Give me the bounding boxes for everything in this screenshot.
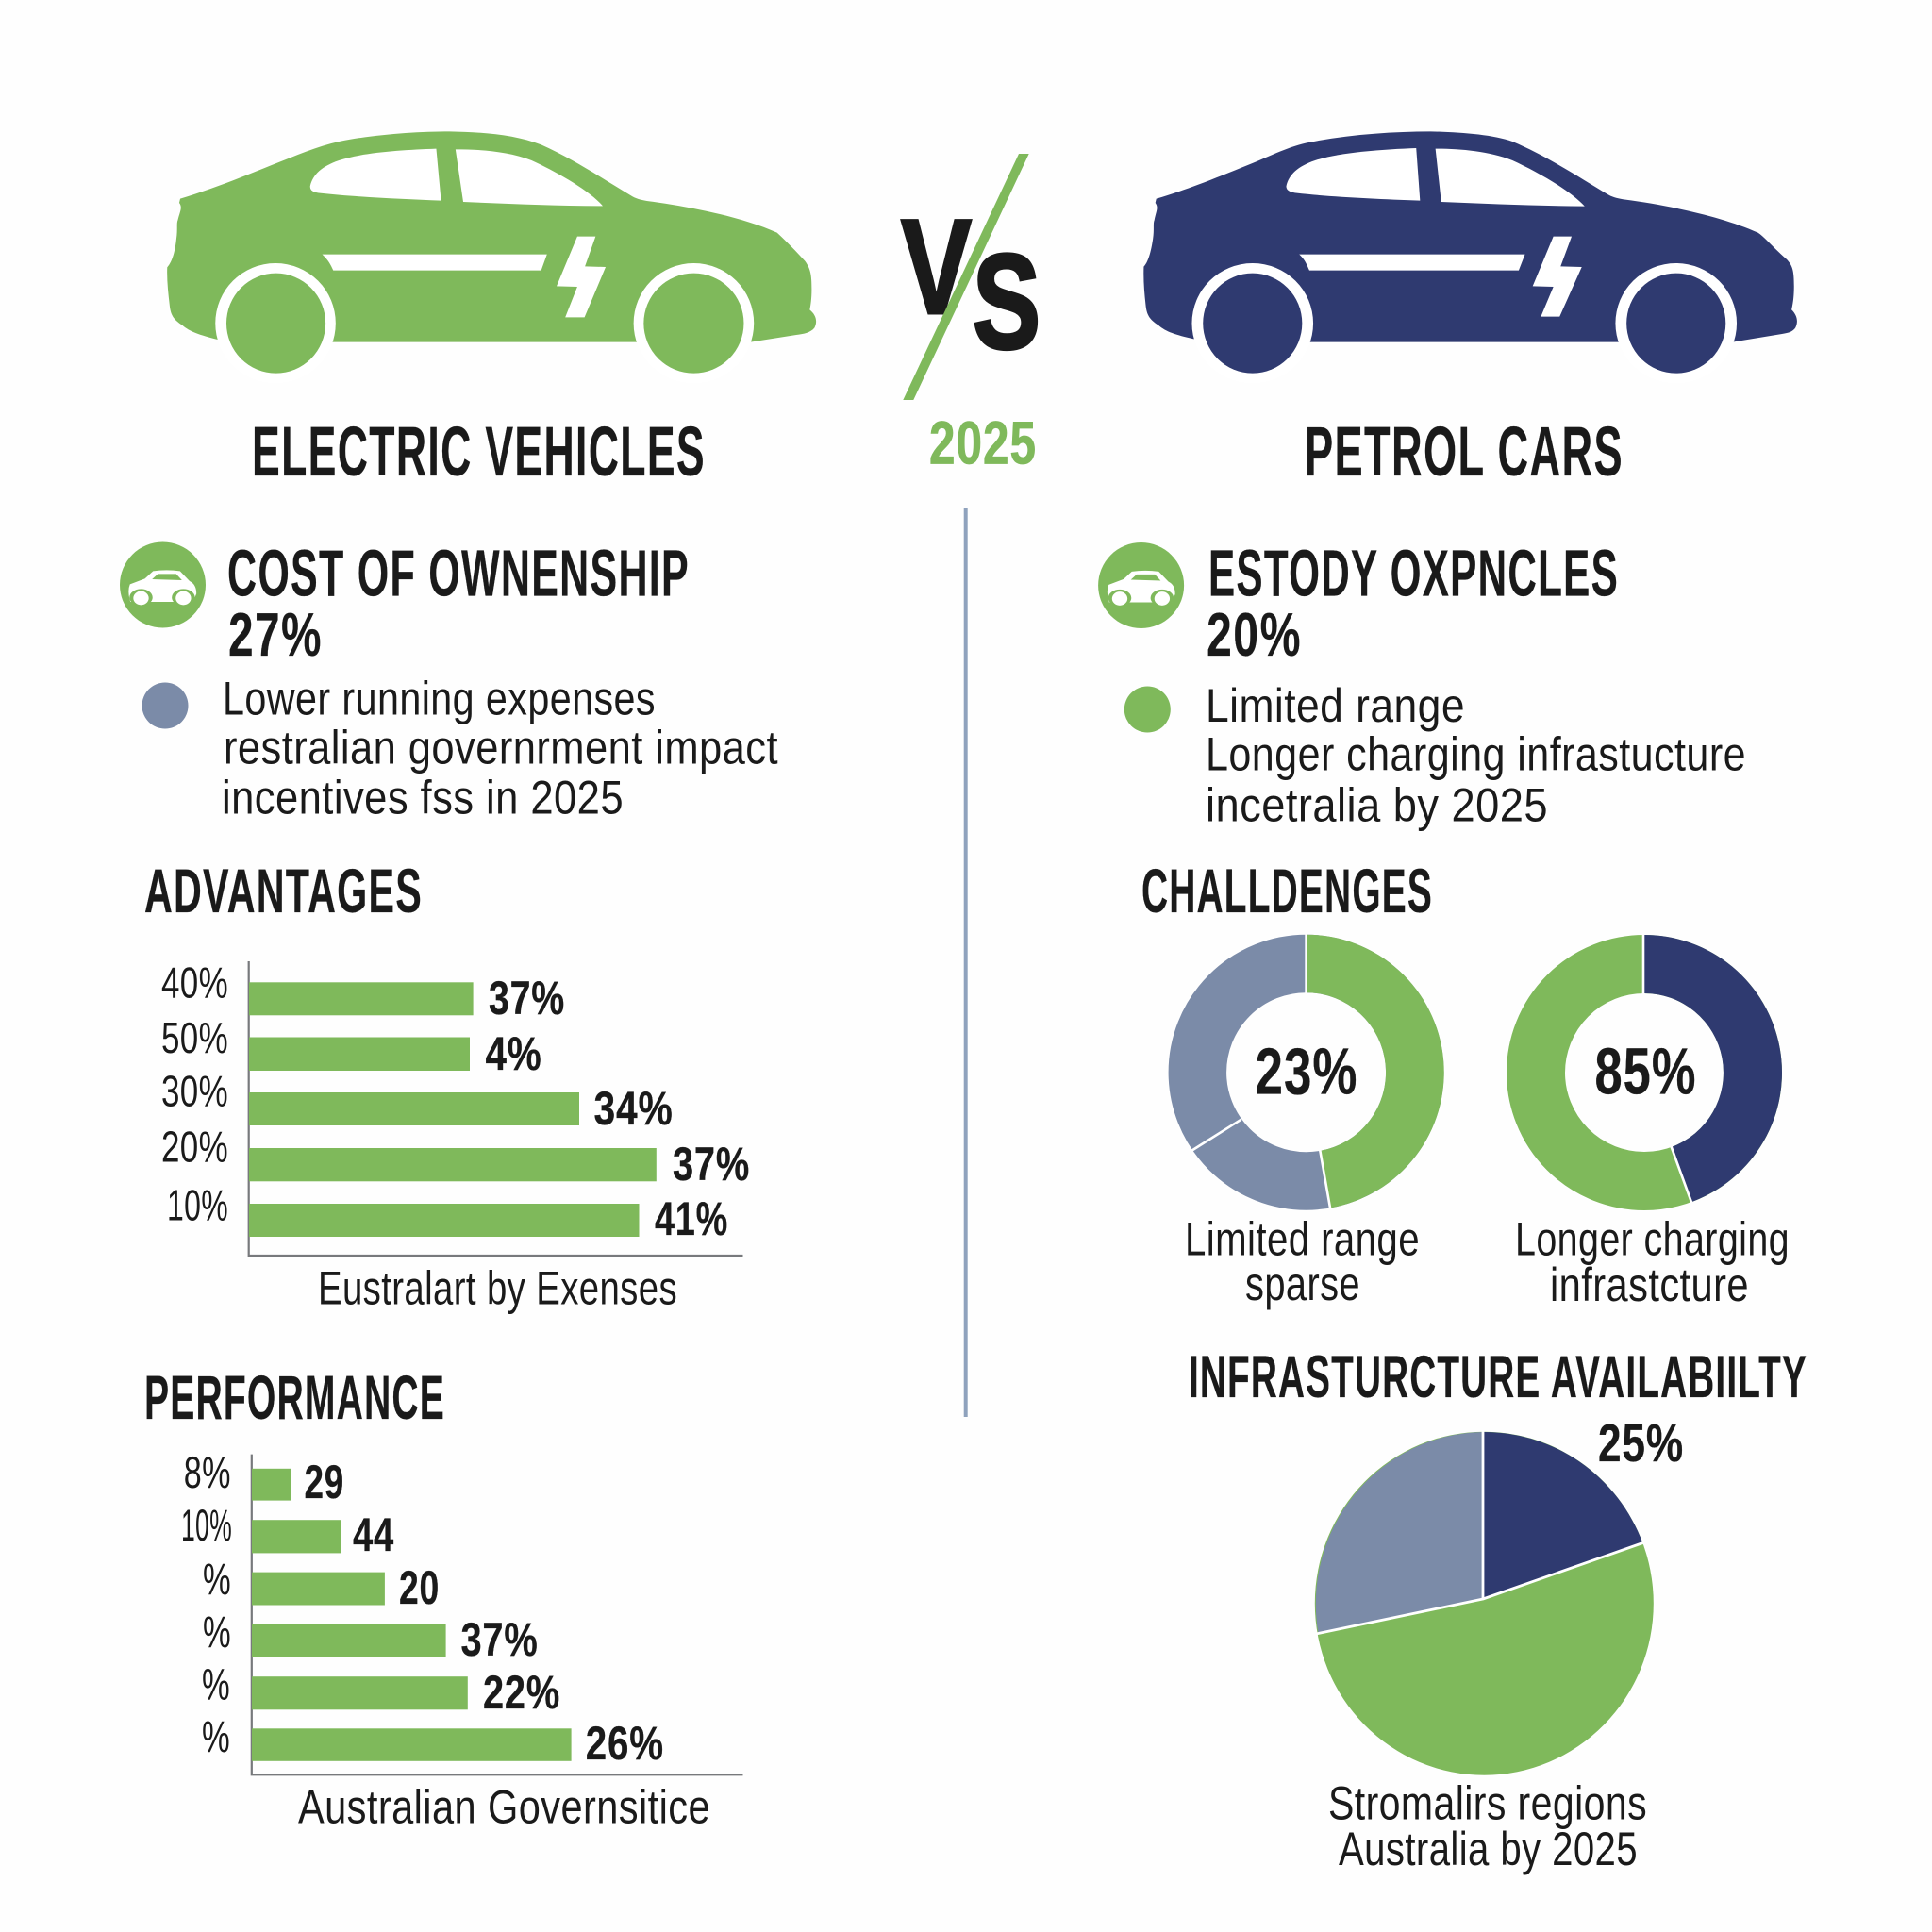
bar chart: advantages: 37% [673,1138,750,1191]
icon: green circle with car [120,541,206,628]
bar chart: advantages: 4% [485,1027,541,1080]
bar chart: advantages: 41% [655,1192,728,1245]
heading: estody oxpncles: ESTODY OXPNCLES [1208,536,1619,609]
bar chart: performance: % [202,1711,230,1761]
bar chart: performance: % [203,1554,231,1604]
panel: infrastructure availability [1189,1344,1807,1875]
panel: petrol cars header [1143,131,1797,491]
callout: 25%: 25% [1598,1413,1684,1474]
heading: petrol cars: PETROL CARS [1305,412,1624,491]
panel: advantages [144,856,750,1314]
bar chart: performance: % [202,1658,230,1709]
bullet [142,683,189,728]
pie caption: Stromalirs regions [1328,1777,1647,1830]
bar chart: performance [181,1447,743,1834]
bar chart: advantages: Eustralart by Exenses [318,1261,677,1314]
stat: 20%: 20% [1207,600,1302,669]
donut chart: longer charging [1515,933,1790,1311]
bar chart: performance: 22% [483,1666,560,1719]
pie caption: Australia by 2025 [1339,1823,1638,1875]
icon: green electric car [167,131,816,383]
bar chart: advantages: 30% [161,1067,228,1116]
pie chart: availability [1315,1430,1654,1775]
bar chart: advantages: 10% [167,1180,228,1229]
panel: challenges [1141,856,1790,1311]
donut chart: limited range [1185,933,1444,1310]
heading: challdenges: CHALLDENGES [1141,856,1433,925]
bullet text: Lower running expenses [223,672,656,724]
year: 2025 [929,409,1037,477]
heading: advantages: ADVANTAGES [144,856,423,925]
bullet text [222,672,778,824]
donut chart: longer charging: Longer charging [1515,1213,1790,1266]
bar chart: performance: 37% [460,1613,538,1666]
panel: subsidy expenses [1098,536,1746,832]
icon: navy car [1143,131,1797,383]
bullet [1124,687,1171,732]
slash [903,154,1029,400]
bar chart: performance: 44 [353,1508,394,1561]
bullet text: Longer charging infrastucture [1206,728,1746,781]
bullet text: incentives fss in 2025 [222,771,624,824]
panel: versus badge [901,154,1041,477]
bullet text [1206,679,1746,832]
bar chart: advantages: 50% [161,1013,228,1062]
heading: performance: PERFORMANCE [144,1362,445,1432]
donut chart: longer charging: infrastcture [1550,1258,1749,1311]
bar chart: performance: 26% [586,1717,664,1770]
bar chart: performance: 8% [184,1447,231,1497]
donut chart: limited range: Limited range [1185,1213,1420,1266]
pie caption [1328,1777,1647,1875]
center divider [964,508,968,1417]
bullet text: Limited range [1206,679,1465,732]
bar chart: performance: 29 [304,1456,344,1508]
donut chart: limited range: sparse [1245,1257,1360,1310]
bar chart: advantages: 40% [161,958,228,1007]
bar chart: performance: % [203,1607,231,1657]
bullet text: restralian governrment impact [224,721,778,774]
panel: cost of ownership [120,536,778,824]
bar chart: advantages [161,958,750,1314]
icon: green circle with car [1098,542,1184,628]
bar chart: performance: Australian Governsitice [298,1781,710,1834]
donut chart: longer charging: 85% [1594,1034,1696,1108]
bar chart: advantages: 34% [594,1082,674,1135]
bar chart: advantages: 37% [489,972,565,1024]
letter S: S [973,227,1041,377]
letter V: V [901,192,972,342]
heading: electric vehicles: ELECTRIC VEHICLES [252,412,706,491]
bar chart: advantages: 20% [161,1123,228,1172]
bullet text: incetralia by 2025 [1206,779,1548,832]
panel: electric vehicles header [167,131,816,491]
bar chart: performance: 10% [181,1500,232,1550]
panel: performance [144,1362,743,1834]
heading: cost of ownership: COST OF OWNENSHIP [227,536,690,609]
stat: 27%: 27% [228,600,323,669]
bar chart: performance: 20 [399,1561,440,1614]
donut chart: limited range: 23% [1255,1034,1358,1108]
